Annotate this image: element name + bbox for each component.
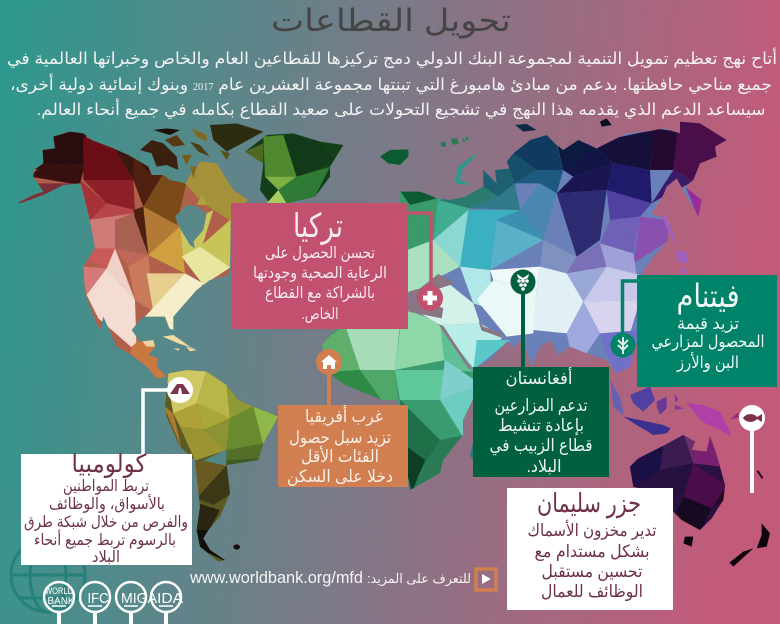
link: more information url: للتعرف على المزيد:	[367, 571, 471, 587]
icon: play button	[476, 569, 496, 590]
watermark: faint globe	[11, 538, 85, 612]
icon: grapes	[517, 274, 529, 291]
panel: afghanistan: بإعادة تنشيط	[498, 416, 584, 435]
seas cut into eurasia	[408, 274, 503, 371]
connector and pin: west africa housing	[316, 349, 342, 405]
panel: solomon islands: جزر سليمان	[537, 488, 641, 519]
panel: turkey: بالشراكة مع القطاع	[265, 285, 375, 303]
panel: afghanistan: تدعم المزارعين	[494, 396, 588, 416]
panel: solomon islands: تدير مخزون الأسماك	[528, 520, 657, 540]
panel: colombia	[21, 450, 192, 566]
connector and pin: afghanistan grapes	[510, 270, 536, 367]
panel: vietnam: فيتنام	[676, 278, 740, 315]
panel: west africa	[278, 405, 408, 487]
icon: fish	[743, 414, 762, 422]
panel: afghanistan: البلاد.	[526, 457, 562, 476]
intro paragraph: أتاح نهج تعظيم تمويل التنمية لمجموعة البنك الدولي دمج تركيزها للقطاعين العام والخاص وخبراتها العالمية في	[7, 47, 777, 69]
panel: vietnam: تزيد قيمة	[677, 315, 739, 334]
panel: colombia: تربط المواطنين	[63, 478, 149, 495]
map: eurasia	[398, 118, 732, 380]
connector and pin: vietnam crops	[610, 281, 637, 358]
panel: solomon islands	[507, 488, 673, 610]
logo: world bank: WORLD	[45, 586, 73, 596]
intro paragraph: جميع مناحي حافظتها. بدعم من مبادئ هامبورغ التي تبنتها مجموعة العشرين عام 2017 وبنوك إنمائية دولية أخرى،	[10, 73, 772, 95]
logo: ida: IDA	[157, 590, 183, 607]
panel: west africa: غرب أفريقيا	[305, 405, 383, 426]
panel: turkey: تركيا	[293, 207, 343, 245]
panel: west africa: تزيد سبل حصول	[289, 428, 391, 447]
panel: colombia: البلاد	[92, 549, 120, 566]
intro paragraph: سيساعد الدعم الذي يقدمه هذا النهج في تشجيع التحولات على صعيد القطاع بكامله في جميع أنحاء العالم.	[36, 98, 766, 120]
map: south america	[160, 367, 280, 567]
panel: turkey	[231, 203, 408, 329]
panel: turkey: الرعاية الصحية وجودتها	[253, 265, 387, 283]
logo: world bank	[44, 582, 75, 624]
logos: world bank group institutions	[44, 582, 183, 624]
icon: road	[170, 384, 190, 394]
link: more information url: www.worldbank.org/mfd	[189, 569, 363, 587]
world map	[0, 118, 770, 567]
panel: vietnam: المحصول لمزارعي	[652, 333, 764, 352]
icon: medical cross	[423, 291, 437, 305]
icon: house	[321, 355, 337, 369]
connector and pin: solomon islands fish	[739, 405, 765, 493]
map: africa	[322, 310, 473, 490]
logo: miga: MIGA	[121, 590, 157, 607]
panel: turkey: تحسن الحصول على	[265, 245, 375, 263]
panel: vietnam	[637, 275, 777, 387]
panel: west africa: الفئات الأقل	[301, 446, 379, 466]
panel: colombia: والفرص من خلال شبكة طرق	[24, 514, 188, 532]
panel: colombia: كولومبيا	[72, 450, 147, 478]
panel: afghanistan	[473, 367, 609, 477]
panel: vietnam: البن والأرز	[676, 352, 739, 373]
title: تحويل القطاعات	[271, 3, 511, 39]
panel: west africa: دخلا على السكن	[287, 467, 393, 486]
panel: solomon islands: بشكل مستدام مع	[534, 542, 650, 562]
map: south-east asia, australia and new zealand	[610, 380, 770, 567]
map: greenland and iceland	[245, 133, 408, 203]
link: more information url	[189, 569, 471, 587]
icon: wheat	[618, 337, 628, 354]
panel: colombia: بالأسواق، والوظائف	[49, 494, 165, 514]
logo: world bank: BANK	[48, 596, 75, 607]
logo: ifc: IFC	[88, 590, 109, 607]
connector and pin: turkey health	[408, 213, 443, 311]
connector and pin: colombia roads	[143, 377, 193, 454]
panel: turkey: الخاص.	[302, 306, 338, 324]
panel: solomon islands: تحسين مستقبل	[542, 562, 643, 581]
intro paragraph	[7, 47, 777, 120]
panel: afghanistan: قطاع الزبيب في	[490, 436, 592, 456]
panel: solomon islands: الوظائف للعمال	[541, 582, 643, 601]
map: north america	[0, 120, 263, 383]
panel: colombia: بالرسوم تربط جميع أنحاء	[34, 529, 176, 550]
panel: afghanistan: أفغانستان	[506, 367, 572, 388]
